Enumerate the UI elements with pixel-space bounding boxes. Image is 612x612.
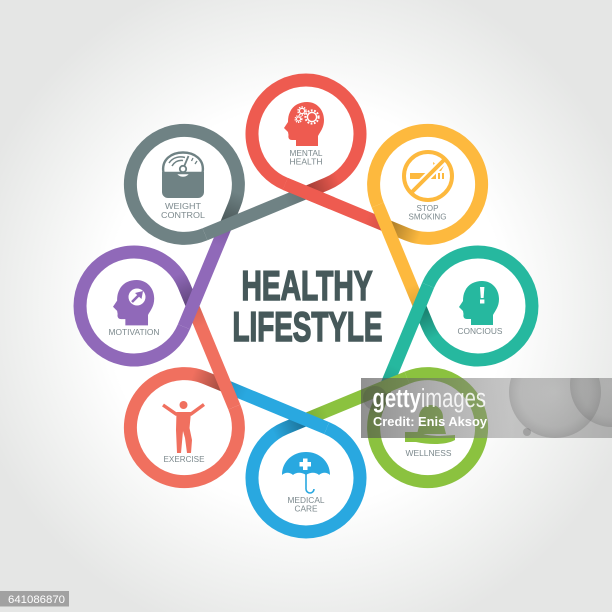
- icon: head with arrow: [113, 280, 154, 325]
- panel: medical care: [282, 452, 330, 514]
- ribbon: medical care: [226, 386, 360, 532]
- panel: stop smoking: [404, 152, 452, 222]
- watermark logo: gettyimages: [372, 385, 486, 413]
- title: LIFESTYLE: [232, 303, 382, 350]
- icon: hand holding figure: [405, 405, 455, 444]
- label: SMOKING: [408, 212, 447, 222]
- label: CONTROL: [161, 210, 205, 220]
- ribbon: exercise: [89, 306, 287, 504]
- ribbon: red tail redrawn over the grey tail end: [285, 184, 332, 203]
- panel: weight control: [161, 152, 205, 220]
- icon: no smoking sign: [404, 152, 452, 200]
- label: [408, 203, 447, 222]
- watermark credit: Credit: Enis Aksoy: [373, 414, 488, 429]
- icon: umbrella with cross: [282, 452, 330, 493]
- title: HEALTHY: [242, 262, 372, 309]
- white circle interiors: [80, 80, 532, 532]
- panel: wellness: [405, 405, 455, 458]
- ribbon: wellness: [306, 325, 504, 523]
- icon: weighing scale: [162, 152, 204, 198]
- panel: concious: [458, 281, 503, 336]
- ribbon: stop smoking: [325, 108, 523, 306]
- ribbon: motivation: [80, 226, 226, 360]
- label: STOP: [416, 203, 439, 213]
- icon: person with raised arms: [163, 401, 204, 453]
- image id tag: [0, 591, 69, 606]
- image id tag: 641086870: [8, 594, 65, 606]
- icon: head with exclamation: [459, 281, 499, 325]
- label: MEDICAL: [288, 495, 325, 505]
- title: [232, 262, 382, 350]
- watermark band: [361, 378, 612, 438]
- label: WELLNESS: [406, 448, 452, 458]
- icon: head with gears: [284, 102, 324, 146]
- label: CARE: [294, 504, 318, 514]
- panel: mental health: [284, 102, 324, 166]
- label: EXERCISE: [164, 454, 205, 464]
- label: MENTAL: [290, 148, 323, 158]
- ribbon: mental health: [252, 80, 386, 226]
- panel: motivation: [108, 280, 160, 337]
- panel: exercise: [163, 401, 205, 464]
- label: HEALTH: [290, 156, 322, 166]
- label: CONCIOUS: [458, 326, 503, 336]
- label: MOTIVATION: [108, 327, 160, 337]
- label: [288, 495, 325, 514]
- label: [290, 148, 323, 166]
- ribbon: concious: [386, 252, 532, 386]
- label: [161, 201, 205, 220]
- label: WEIGHT: [165, 201, 202, 211]
- ribbon ring of eight looped circles: [80, 80, 532, 532]
- ribbon: weight control: [108, 89, 306, 287]
